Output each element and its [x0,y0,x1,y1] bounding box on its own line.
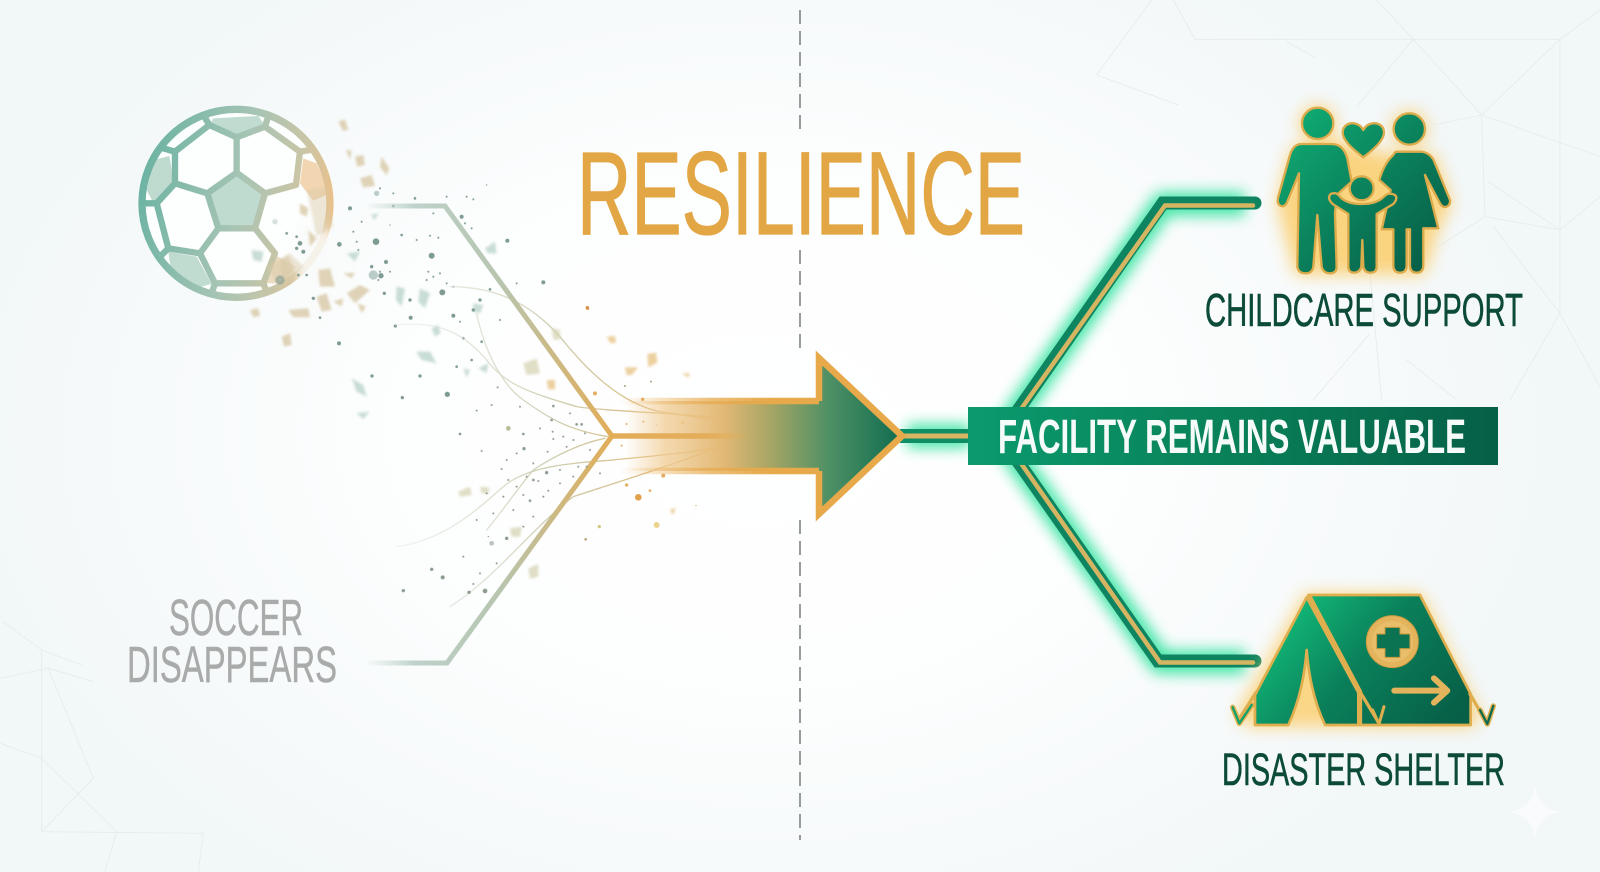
dissolving edge of the ball [288,222,338,285]
icon: family [1277,105,1452,275]
tent glow [1235,593,1482,727]
green connector from arrow to bar [900,429,970,443]
polygon network top right [1097,0,1600,400]
big arrow [612,358,902,514]
exit arrow [1394,678,1447,703]
ridge seam [1309,596,1360,725]
dashed divider [799,10,801,840]
label: soccer disappears [127,589,337,693]
shards [250,119,497,419]
small shards [458,328,690,579]
green connector bottom branch [1000,436,1255,662]
medical cross badge [1366,616,1418,668]
sparkle watermark [1508,785,1562,839]
soccer ball [141,109,338,298]
particles near the arrow [402,306,697,594]
polygon network bottom left [0,622,203,872]
label: soccer disappears: SOCCER [169,589,303,646]
heading: resilience: RESILIENCE [577,128,1025,260]
main converging line [360,206,612,663]
green connector top branch [1000,203,1255,436]
icon glow [1277,105,1452,275]
green network glow [907,204,1245,662]
particles from the ball [250,119,589,419]
icon: shelter tent [1233,593,1493,727]
label: soccer disappears: DISAPPEARS [127,636,337,693]
converging strands [395,287,747,607]
guy lines and stakes [1233,691,1493,724]
